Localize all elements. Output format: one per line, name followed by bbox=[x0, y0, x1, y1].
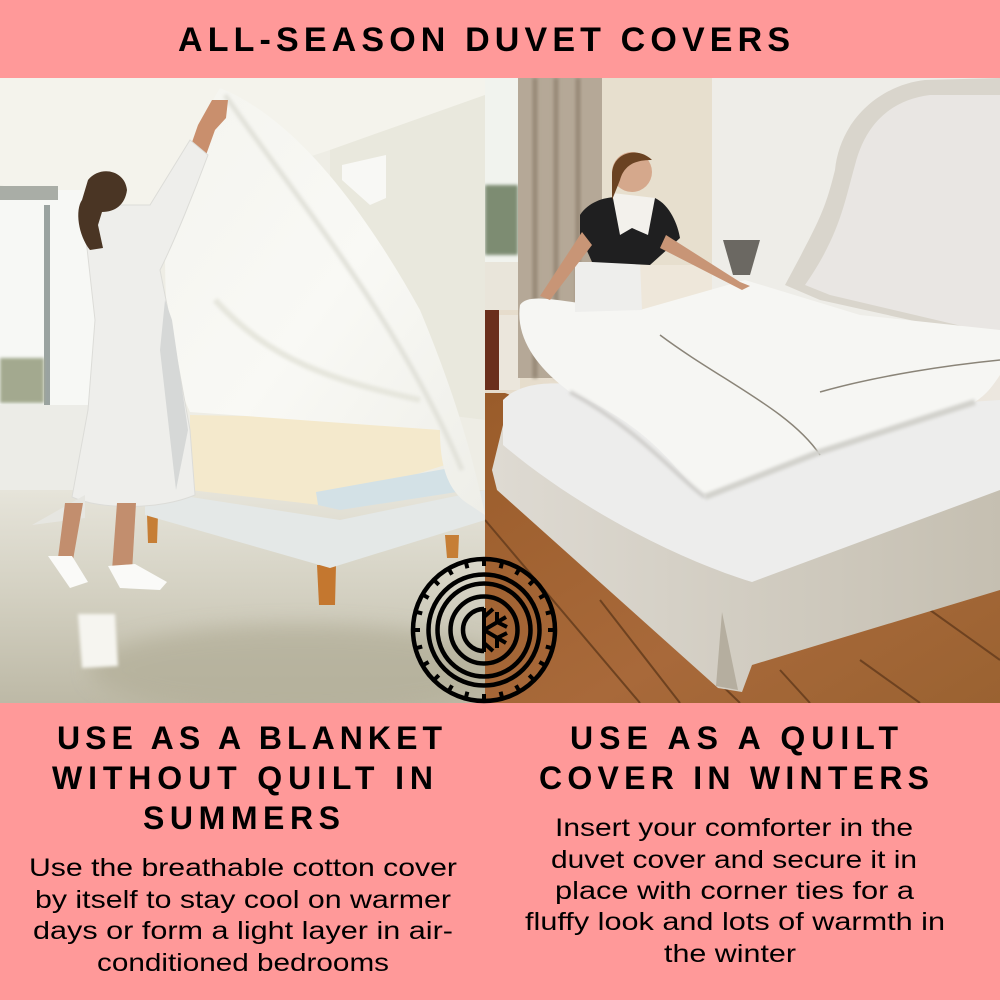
panel: winter use bbox=[525, 720, 945, 968]
text block: winter description bbox=[525, 814, 945, 968]
text block: summer description: by itself to stay cool on warmer bbox=[35, 886, 451, 914]
icon: summer/winter dial bbox=[413, 559, 555, 701]
title: ALL-SEASON DUVET COVERS bbox=[178, 21, 790, 59]
photo: maid making bed with fluffy duvet bbox=[485, 78, 1000, 703]
heading: summer: SUMMERS bbox=[143, 800, 340, 836]
text block: summer description: conditioned bedrooms bbox=[97, 949, 389, 977]
text block: winter description: fluffy look and lots of warmth in bbox=[525, 908, 945, 936]
text block: winter description: place with corner ties for a bbox=[555, 877, 914, 905]
heading: summer: USE AS A BLANKET bbox=[57, 720, 442, 756]
panel: summer use bbox=[29, 720, 457, 977]
text block: winter description: the winter bbox=[664, 940, 796, 968]
text block: summer description: Use the breathable cotton cover bbox=[29, 854, 457, 882]
text block: winter description: Insert your comforter in the bbox=[555, 814, 913, 842]
photo: woman spreading white sheet over bed bbox=[0, 78, 510, 715]
heading: summer bbox=[52, 720, 442, 836]
text block: summer description bbox=[29, 854, 457, 977]
text block: summer description: days or form a light layer in air- bbox=[33, 917, 453, 945]
heading: winter: USE AS A QUILT bbox=[570, 720, 898, 756]
text block: winter description: duvet cover and secure it in bbox=[551, 846, 917, 874]
heading: summer: WITHOUT QUILT IN bbox=[52, 760, 433, 796]
heading: winter bbox=[539, 720, 929, 796]
heading: winter: COVER IN WINTERS bbox=[539, 760, 929, 796]
